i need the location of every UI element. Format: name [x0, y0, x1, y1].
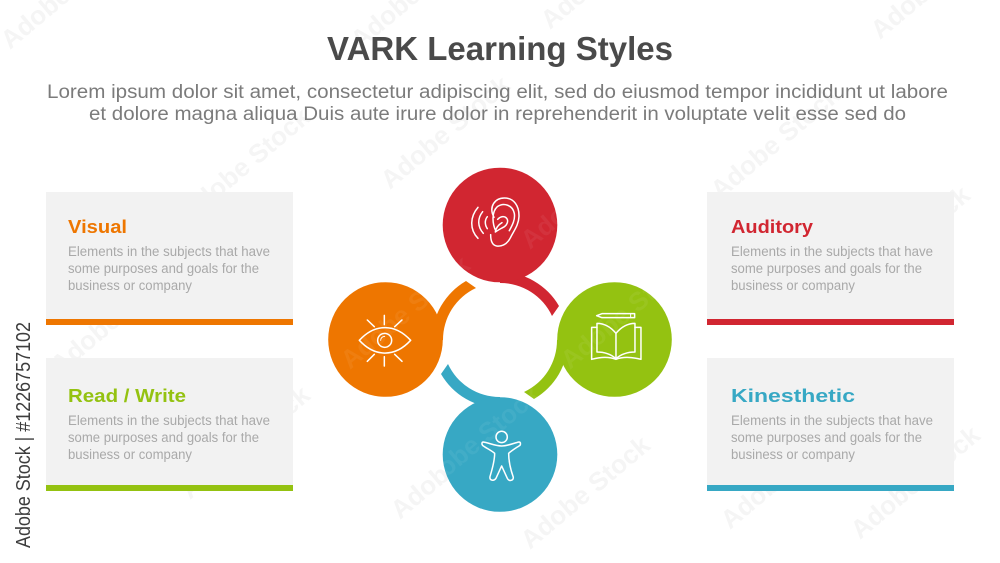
panel: Kinesthetic — [707, 358, 954, 491]
watermark: faint overlay on circles: Adobe Stock — [335, 249, 476, 375]
intro text: et dolore magna aliqua Duis aute irure dolor in reprehenderit in voluptate velit esse sed do — [89, 104, 906, 125]
panel: Auditory: Elements in the subjects that have — [731, 244, 933, 259]
panel: Kinesthetic: some purposes and goals for the — [731, 430, 922, 445]
watermark: faint overlay on circles: Adobe Stock — [515, 129, 656, 255]
panel: Visual: some purposes and goals for the — [68, 261, 259, 276]
stock image id label: Adobe Stock | #1226757102 — [13, 322, 35, 548]
watermark: Adobe Stock on background: Adobe Stock — [715, 409, 856, 535]
panel: Kinesthetic: Kinesthetic — [731, 386, 855, 406]
ring arcs connecting circles — [432, 272, 568, 408]
title: VARK Learning Styles — [327, 30, 673, 67]
circle: kinesthetic — [443, 397, 557, 512]
watermark: Adobe Stock on background: Adobe Stock — [705, 79, 846, 205]
watermark: Adobe Stock on background: Adobe Stock — [385, 399, 526, 525]
panel: Read / Write: Elements in the subjects that have — [68, 413, 270, 428]
icon: person with raised arms — [482, 431, 520, 480]
panel: Auditory: Auditory — [731, 217, 813, 237]
panel: Auditory — [707, 192, 954, 325]
panel: Read / Write: Read / Write — [68, 386, 186, 406]
watermark: Adobe Stock on background: Adobe Stock — [175, 379, 316, 505]
circle: visual — [328, 282, 443, 397]
panel: Auditory: business or company — [731, 278, 855, 293]
watermark: Adobe Stock on background: Adobe Stock — [375, 69, 516, 195]
intro text: Lorem ipsum dolor sit amet, consectetur adipiscing elit, sed do eiusmod tempor incididunt ut labore — [47, 82, 948, 103]
watermark: Adobe Stock on background: Adobe Stock — [845, 419, 986, 545]
circle: auditory — [443, 168, 557, 282]
panel: Read / Write — [46, 358, 293, 491]
watermark: Adobe Stock on background: Adobe Stock — [515, 429, 656, 555]
panel: Read / Write: business or company — [68, 447, 192, 462]
icon: ear — [472, 198, 519, 246]
watermark: Adobe Stock on background: Adobe Stock — [45, 254, 186, 380]
intro text — [47, 82, 948, 125]
panel: Visual: Elements in the subjects that have — [68, 244, 270, 259]
watermark: Adobe Stock on background: Adobe Stock — [835, 179, 976, 305]
panel: Visual: business or company — [68, 278, 192, 293]
watermark: Adobe Stock on background: Adobe Stock — [175, 101, 316, 227]
panel: Kinesthetic: Elements in the subjects that have — [731, 413, 933, 428]
icon: book and pencil — [592, 314, 641, 359]
panel: Visual: Visual — [68, 217, 127, 237]
icon: eye — [359, 315, 411, 366]
panel: Kinesthetic: business or company — [731, 447, 855, 462]
watermark: faint overlay on circles: Adobe Stock — [405, 379, 546, 505]
panel: Auditory: some purposes and goals for the — [731, 261, 922, 276]
panel: Visual — [46, 192, 293, 325]
circle: read / write — [557, 282, 672, 397]
watermark: faint overlay on circles — [335, 129, 696, 505]
panel: Read / Write: some purposes and goals for the — [68, 430, 259, 445]
watermark: faint overlay on circles: Adobe Stock — [555, 249, 696, 375]
